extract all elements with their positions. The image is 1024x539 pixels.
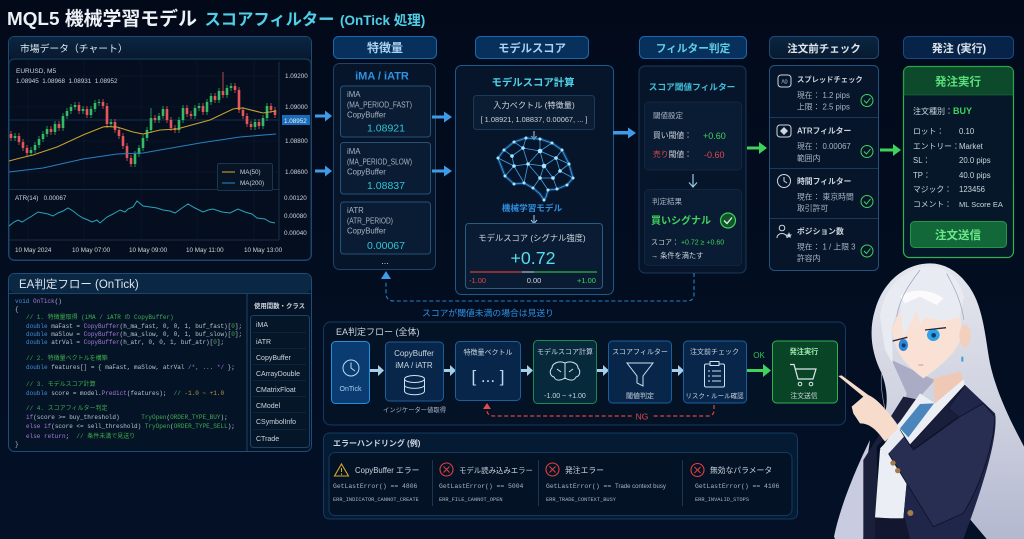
character: pointing anime girl	[834, 263, 1024, 539]
card: iATR: iATR	[347, 206, 364, 215]
step: feature vector	[456, 342, 520, 400]
error: order: GetLastError() == Trade context busy	[546, 483, 666, 490]
list: classes: CMatrixFloat	[256, 387, 296, 394]
step: model score	[534, 340, 596, 404]
code block: double score = model.Predict(features); // -1.0 ~ +1.0	[26, 390, 224, 397]
header: filter: フィルター判定	[656, 42, 731, 55]
chart legend: MA(200)	[240, 180, 264, 187]
code block: void OnTick()	[15, 298, 62, 305]
code block: double features[] = { maFast, maSlow, atrVal /*, ... */ };	[26, 364, 235, 371]
error: model load	[439, 463, 533, 503]
step: score filter: 閾値判定	[626, 391, 654, 400]
thresholds: 閾値設定	[653, 110, 683, 120]
score box: -1.00	[469, 276, 486, 285]
button: send order	[910, 222, 1006, 248]
card: iMA fast: iMA	[347, 90, 361, 99]
axis labels: 10 May 13:00	[244, 247, 283, 254]
card: iMA fast: (MA_PERIOD_FAST)	[347, 100, 412, 110]
order details: 20.0 pips	[959, 156, 991, 165]
chart legend: MA(50)	[240, 169, 261, 176]
code block: else if(score <= sell_threshold) TryOpen(ORDER_TYPE_SELL);	[26, 423, 235, 430]
ellipsis: ...	[381, 256, 389, 266]
thresholds: 買い閾値：	[653, 130, 692, 140]
row: time: 時間フィルター	[797, 176, 852, 186]
header: checks	[770, 36, 878, 58]
step: score filter: スコアフィルター	[612, 347, 668, 356]
list: classes: CopyBuffer	[256, 355, 292, 362]
row: positions: 現在： 1 / 上限 3	[797, 242, 856, 252]
axis labels: 1.08600	[285, 169, 308, 176]
panel: overall EA flow	[324, 322, 846, 425]
panel: pre-order checks	[770, 36, 878, 270]
result: 判定結果	[652, 196, 682, 206]
panel: market data chart	[8, 36, 312, 260]
card: iATR: (ATR_PERIOD)	[347, 216, 393, 226]
axis labels: 10 May 07:00	[72, 247, 111, 254]
error: order: 発注エラー	[565, 465, 604, 475]
card: iMA fast: CopyBuffer	[347, 110, 386, 120]
arrow	[597, 365, 609, 376]
header: execution	[904, 36, 1014, 58]
arrow	[672, 365, 684, 376]
line: MA200	[9, 134, 276, 172]
axis labels: 10 May 11:00	[186, 247, 224, 254]
line: ATR	[9, 201, 275, 226]
result: → 条件を満たす	[651, 251, 703, 260]
card: iATR: CopyBuffer	[347, 226, 386, 236]
arrow: down to score	[531, 215, 537, 224]
step: CopyBuffer: CopyBuffer	[394, 349, 434, 358]
order details: 0.10	[959, 127, 975, 136]
axis labels: 1.08952	[284, 118, 307, 125]
eyes	[893, 328, 946, 351]
panel: model score	[456, 36, 614, 294]
panel: order execution	[904, 36, 1014, 258]
order details: Market	[959, 142, 984, 151]
arrow	[521, 365, 533, 376]
tie	[900, 403, 934, 437]
arrow: filter to checks	[747, 142, 767, 154]
panel: filter decision	[639, 36, 746, 273]
error: CopyBuffer: GetLastError() == 4806	[333, 483, 418, 490]
arrow	[370, 365, 384, 376]
sub-heading: 発注実行	[935, 74, 981, 88]
cuff	[880, 429, 904, 457]
axis labels: ATR(14) 0.00067	[15, 195, 67, 202]
step: feature vector: [ ... ]	[471, 367, 505, 386]
step: OnTick	[332, 342, 370, 404]
axis labels: 10 May 2024	[15, 247, 52, 254]
error: CopyBuffer: CopyBuffer エラー	[355, 466, 419, 475]
label: OK: OK	[753, 351, 765, 360]
header: model score: モデルスコア	[498, 41, 566, 55]
chart legend	[218, 164, 272, 190]
arrow: checks to execution	[880, 144, 901, 156]
axis labels: 1.08800	[285, 138, 308, 145]
order details: マジック：	[913, 185, 952, 194]
label: skip note: スコアが閾値未満の場合は見送り	[422, 307, 554, 318]
card: iATR: 0.00067	[367, 240, 405, 252]
order details: TP：	[913, 171, 931, 180]
panel: error handling	[324, 433, 798, 519]
code block: }	[15, 441, 19, 448]
row: positions: ポジション数	[797, 226, 844, 236]
title: MQL5 機械学習モデル	[7, 9, 197, 30]
panel: EA decision flow code	[8, 274, 312, 452]
hair strand lines	[881, 270, 964, 410]
error: invalid params	[691, 464, 780, 503]
earring	[961, 357, 963, 362]
heading: EA判定フロー (全体)	[336, 326, 420, 337]
card: iMA fast: 1.08921	[367, 122, 405, 134]
row: time	[778, 174, 873, 213]
code block: double maSlow = CopyBuffer(h_ma_slow, 0, 0, 1, buf_slow)[0];	[26, 331, 242, 338]
arrow: OK	[747, 364, 771, 377]
heading: market data: 市場データ（チャート）	[20, 42, 128, 55]
code block: double atrVal = CopyBuffer(h_atr, 0, 0, 1, buf_atr)[0];	[26, 339, 224, 346]
code block: // 2. 特徴量ベクトルを構築	[26, 354, 108, 362]
lapel	[910, 385, 965, 448]
arrows: features to model	[432, 112, 452, 176]
chart: candlesticks: 1.08945 1.08968 1.08931 1.08952	[16, 78, 118, 85]
list: classes: iMA	[256, 322, 268, 329]
axis labels: 0.00120	[284, 195, 307, 202]
card: iMA fast	[340, 86, 430, 137]
thresholds: 売り閾値：	[653, 149, 692, 159]
row: ATR	[777, 125, 873, 163]
step: model score: -1.00 ~ +1.00	[544, 393, 586, 400]
code block: // 3. モデルスコア計算	[26, 380, 96, 388]
list: classes: CModel	[256, 403, 281, 410]
order details: ロット：	[913, 127, 944, 136]
error: model load: ERR_FILE_CANNOT_OPEN	[439, 497, 503, 503]
hand	[838, 375, 898, 442]
left hair tail	[834, 440, 870, 539]
card: iATR	[340, 202, 430, 254]
row: time: 現在： 東京時間	[797, 192, 854, 202]
order details: 40.0 pips	[959, 171, 991, 180]
error: order	[546, 463, 666, 503]
row: spread	[778, 75, 873, 112]
arrow: NG loop	[483, 403, 714, 422]
score box: +1.00	[577, 276, 596, 285]
back hair	[872, 263, 1024, 539]
chart labels: EURUSD, M5	[16, 68, 56, 75]
heading: EA flow: EA判定フロー (OnTick)	[19, 278, 139, 291]
step: execute: 発注実行	[790, 347, 818, 356]
card: iMA slow: iMA	[347, 147, 361, 156]
row: spread: 上限： 2.5 pips	[797, 102, 850, 112]
step: score filter	[608, 341, 672, 403]
wicks	[15, 83, 267, 167]
list: classes	[250, 316, 310, 448]
step: OnTick: OnTick	[340, 386, 362, 393]
card: iMA slow: CopyBuffer	[347, 168, 386, 176]
heading: functions and classes: 使用関数・クラス	[254, 301, 305, 310]
shirt	[875, 379, 967, 519]
score box	[466, 224, 602, 288]
axis labels	[15, 73, 308, 254]
panel: features	[334, 36, 436, 270]
thresholds: -0.60	[704, 150, 725, 160]
step: execute: 注文送信	[790, 391, 818, 400]
sub-heading: スコア閾値フィルター	[649, 81, 735, 92]
row: ATR: 現在： 0.00067	[797, 141, 851, 151]
header: filter	[640, 36, 746, 58]
chart: candlesticks	[9, 59, 311, 260]
step: execute	[772, 341, 838, 403]
ear	[959, 324, 971, 348]
sub-heading: iMA / iATR: iMA / iATR	[355, 70, 409, 82]
axis labels: 10 May 09:00	[129, 247, 168, 254]
list: classes: iATR	[256, 339, 271, 346]
axis labels: 0.00040	[284, 230, 307, 237]
header: execution: 発注 (実行)	[932, 41, 987, 55]
error: model load: モデル読み込みエラー	[459, 466, 533, 475]
row: ATR: ATRフィルター	[797, 126, 851, 136]
code block: if(score >= buy_threshold) TryOpen(ORDER_TYPE_BUY);	[26, 414, 228, 421]
code block	[15, 298, 242, 448]
code block: // 1. 特徴量取得 (iMA / iATR の CopyBuffer)	[26, 313, 174, 321]
caption: indicator: インジケーター値取得	[383, 405, 446, 414]
line: MA50	[9, 108, 276, 161]
axis labels: 1.09200	[285, 73, 308, 80]
row: ATR: 範囲内	[797, 153, 821, 163]
heading: エラーハンドリング (例)	[333, 438, 421, 448]
shaded hair behind neck	[892, 360, 935, 410]
row: spread: スプレッドチェック	[797, 75, 863, 84]
axis labels: 0.00080	[284, 213, 307, 220]
order details: ML Score EA	[959, 200, 1003, 209]
error: CopyBuffer	[333, 464, 419, 503]
jacket buttons	[890, 460, 913, 516]
skirt	[875, 518, 910, 539]
order details: 注文種別：BUY	[913, 106, 972, 116]
jacket left front	[863, 397, 920, 539]
order details: エントリー：	[913, 142, 960, 151]
score box: モデルスコア (シグナル強度)	[478, 233, 586, 243]
input vector: 入力ベクトル (特徴量)	[493, 100, 575, 110]
green bodies	[15, 86, 267, 164]
step: CopyBuffer	[386, 342, 444, 401]
result	[644, 190, 742, 266]
arrow: model to filter	[613, 128, 636, 138]
header: features	[334, 36, 436, 58]
sleeve	[888, 403, 995, 527]
mouth	[918, 364, 923, 366]
order details: SL：	[913, 156, 930, 165]
score box: 0.00	[527, 276, 541, 285]
error: model load: GetLastError() == 5004	[439, 483, 524, 490]
step: feature vector: 特徴量ベクトル	[464, 348, 512, 356]
icon: neural brain	[496, 131, 574, 202]
row: positions: 許容内	[797, 253, 821, 263]
header: checks: 注文前チェック	[787, 42, 861, 55]
card: iMA slow	[340, 142, 430, 194]
button: send order: 注文送信	[935, 228, 981, 242]
price tag	[282, 115, 310, 125]
title: スコアフィルター	[204, 11, 334, 29]
step: pre-order: リスク・ルール確認	[685, 391, 744, 400]
label: ML model: 機械学習モデル	[502, 202, 562, 213]
list: classes: CTrade	[256, 436, 279, 443]
axis labels: 1.09000	[285, 104, 308, 111]
error: invalid params: ERR_INVALID_STOPS	[695, 497, 749, 503]
input vector	[474, 96, 594, 130]
card: iMA slow: 1.08837	[367, 180, 405, 192]
code block: double maFast = CopyBuffer(h_ma_fast, 0, 0, 1, buf_fast)[0];	[26, 323, 242, 330]
input vector: [ 1.08921, 1.08837, 0.00067, ... ]	[481, 115, 587, 124]
result: 買いシグナル	[651, 214, 711, 227]
error: order: ERR_TRADE_CONTEXT_BUSY	[546, 497, 617, 503]
face	[892, 303, 962, 378]
header: features: 特徴量	[367, 40, 403, 55]
error: invalid params: 無効なパラメータ	[710, 465, 772, 475]
title: (OnTick 処理)	[340, 13, 425, 28]
row: spread: /\0	[781, 80, 788, 86]
list: classes: CSymbolInfo	[256, 419, 296, 426]
hair highlight	[900, 291, 943, 305]
neck	[933, 372, 963, 403]
result: スコア： +0.72 ≥ +0.60	[651, 238, 724, 246]
header: model score	[476, 36, 588, 58]
row: spread: 現在： 1.2 pips	[797, 90, 850, 100]
code block: // 4. スコアフィルター判定	[26, 404, 107, 412]
arrow: NG loop: NG	[636, 412, 648, 422]
arrow: down	[689, 174, 697, 187]
order details: 123456	[959, 185, 985, 194]
arrow	[444, 365, 456, 376]
error: invalid params: GetLastError() == 4106	[695, 483, 780, 490]
dashed arrow: skip path	[381, 271, 694, 301]
arrows: chart to features	[315, 110, 332, 176]
sub-heading: モデルスコア計算	[491, 76, 575, 89]
row: time: 取引許可	[797, 203, 828, 213]
thresholds	[644, 102, 742, 170]
step: CopyBuffer: iMA / iATR	[395, 361, 433, 370]
score box: +0.72	[510, 248, 556, 268]
order details: コメント：	[913, 200, 952, 209]
step: pre-order: 注文前チェック	[690, 347, 739, 356]
step: model score: モデルスコア計算	[537, 347, 593, 356]
thresholds: +0.60	[703, 131, 726, 141]
list: classes: CArrayDouble	[256, 371, 300, 378]
code block: {	[15, 306, 19, 313]
error: CopyBuffer: ERR_INDICATOR_CANNOT_CREATE	[333, 497, 419, 503]
order details	[913, 106, 1003, 209]
red bodies	[11, 86, 275, 164]
card: iMA slow: (MA_PERIOD_SLOW)	[347, 158, 412, 166]
row: positions	[777, 225, 873, 263]
code block: else return; // 条件未満で見送り	[26, 432, 135, 440]
jacket body	[875, 385, 996, 539]
bangs	[880, 267, 964, 363]
step: pre-order	[684, 341, 746, 403]
